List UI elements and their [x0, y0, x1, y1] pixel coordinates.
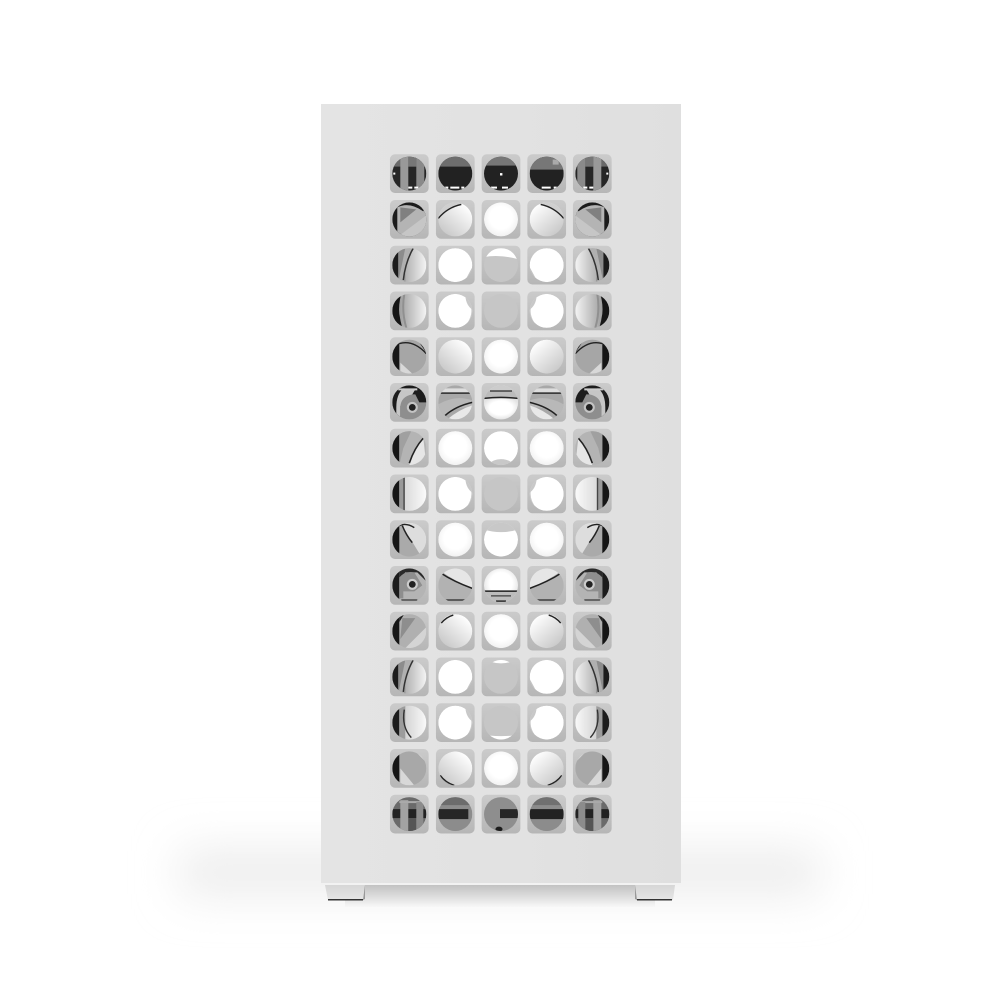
cell r14c4 — [527, 749, 566, 788]
vent row 5 — [390, 337, 612, 376]
cell r15c3 — [482, 795, 520, 833]
vent row 7 — [390, 429, 612, 467]
vent row 15 — [390, 795, 612, 833]
cell r4c3 — [482, 292, 520, 330]
floor shadow — [180, 850, 820, 895]
cell r10c1 — [390, 566, 429, 605]
cell r10c5 — [573, 566, 612, 605]
vent row 6 — [390, 383, 612, 422]
cell r7c3 — [482, 429, 520, 467]
cell r14c3 — [482, 749, 520, 788]
cell r7c2 — [436, 429, 475, 467]
vent row 4 — [390, 292, 612, 330]
case bottom edge — [321, 883, 681, 884]
vent row 11 — [390, 612, 612, 650]
cell r6c3 — [482, 383, 520, 422]
cell r6c4 — [527, 383, 566, 422]
cell r13c2 — [436, 703, 475, 742]
cell r4c5 — [573, 292, 612, 330]
cell r3c4 — [527, 246, 566, 284]
vent row 14 — [390, 749, 612, 788]
cell r1c2 — [436, 154, 475, 193]
vent row 3 — [390, 246, 612, 284]
vent row 13 — [390, 703, 612, 742]
cell r14c2 — [436, 749, 475, 788]
cell r12c3 — [482, 658, 520, 696]
cell r13c1 — [390, 703, 429, 742]
cell r3c5 — [573, 246, 612, 284]
cell r3c2 — [436, 246, 475, 284]
vent row 8 — [390, 475, 612, 513]
cell r5c5 — [573, 337, 612, 376]
cell r4c1 — [390, 292, 429, 330]
cell r8c3 — [482, 475, 520, 513]
cell r1c3 — [482, 154, 520, 193]
cell r11c1 — [390, 612, 429, 650]
cell r8c2 — [436, 475, 475, 513]
shadow under case — [345, 885, 655, 907]
cell r7c5 — [573, 429, 612, 467]
cell r8c4 — [527, 475, 566, 513]
cell r13c5 — [573, 703, 612, 742]
cell r6c2 — [436, 383, 475, 422]
vent row 10 — [390, 566, 612, 605]
cell r9c5 — [573, 520, 612, 559]
vent row 2 — [390, 200, 612, 239]
cell r8c5 — [573, 475, 612, 513]
foot right — [635, 885, 675, 900]
cell r1c4 — [527, 154, 566, 193]
cell r2c1 — [390, 200, 429, 239]
cell r5c2 — [436, 337, 475, 376]
cell r7c1 — [390, 429, 429, 467]
cell r2c5 — [573, 200, 612, 239]
cell r2c4 — [527, 200, 566, 239]
cell r1c5 — [573, 154, 612, 193]
cell r1c1 — [390, 154, 429, 193]
cell r5c4 — [527, 337, 566, 376]
cell r15c4 — [527, 795, 566, 833]
cell r6c1 — [390, 383, 429, 422]
cell r6c5 — [573, 383, 612, 422]
cell r2c2 — [436, 200, 475, 239]
cell r15c5 — [573, 795, 612, 833]
cell r13c3 — [482, 703, 520, 742]
cell r7c4 — [527, 429, 566, 467]
cell r10c3 — [482, 566, 520, 605]
cell r11c5 — [573, 612, 612, 650]
cell r3c3 — [482, 246, 520, 284]
cell r12c5 — [573, 658, 612, 696]
cell r12c2 — [436, 658, 475, 696]
cell r13c4 — [527, 703, 566, 742]
cell r11c4 — [527, 612, 566, 650]
cell r4c2 — [436, 292, 475, 330]
cell r9c4 — [527, 520, 566, 559]
cell r5c3 — [482, 337, 520, 376]
vent row 1 — [390, 154, 612, 193]
cell r3c1 — [390, 246, 429, 284]
cell r15c1 — [390, 795, 429, 833]
cell r5c1 — [390, 337, 429, 376]
cell r2c3 — [482, 200, 520, 239]
cell r14c5 — [573, 749, 612, 788]
cell r12c1 — [390, 658, 429, 696]
cell r9c1 — [390, 520, 429, 559]
cell r11c3 — [482, 612, 520, 650]
cell r10c4 — [527, 566, 566, 605]
cell r12c4 — [527, 658, 566, 696]
cell r4c4 — [527, 292, 566, 330]
cell r9c3 — [482, 520, 520, 559]
cell r9c2 — [436, 520, 475, 559]
cell r8c1 — [390, 475, 429, 513]
cell r10c2 — [436, 566, 475, 605]
foot left — [325, 885, 365, 900]
cell r11c2 — [436, 612, 475, 650]
vent row 12 — [390, 658, 612, 696]
cell r15c2 — [436, 795, 475, 833]
vent row 9 — [390, 520, 612, 559]
vent grid — [390, 154, 612, 833]
case body — [321, 104, 681, 884]
cell r14c1 — [390, 749, 429, 788]
infographic: PC case front view — [188, 104, 812, 906]
